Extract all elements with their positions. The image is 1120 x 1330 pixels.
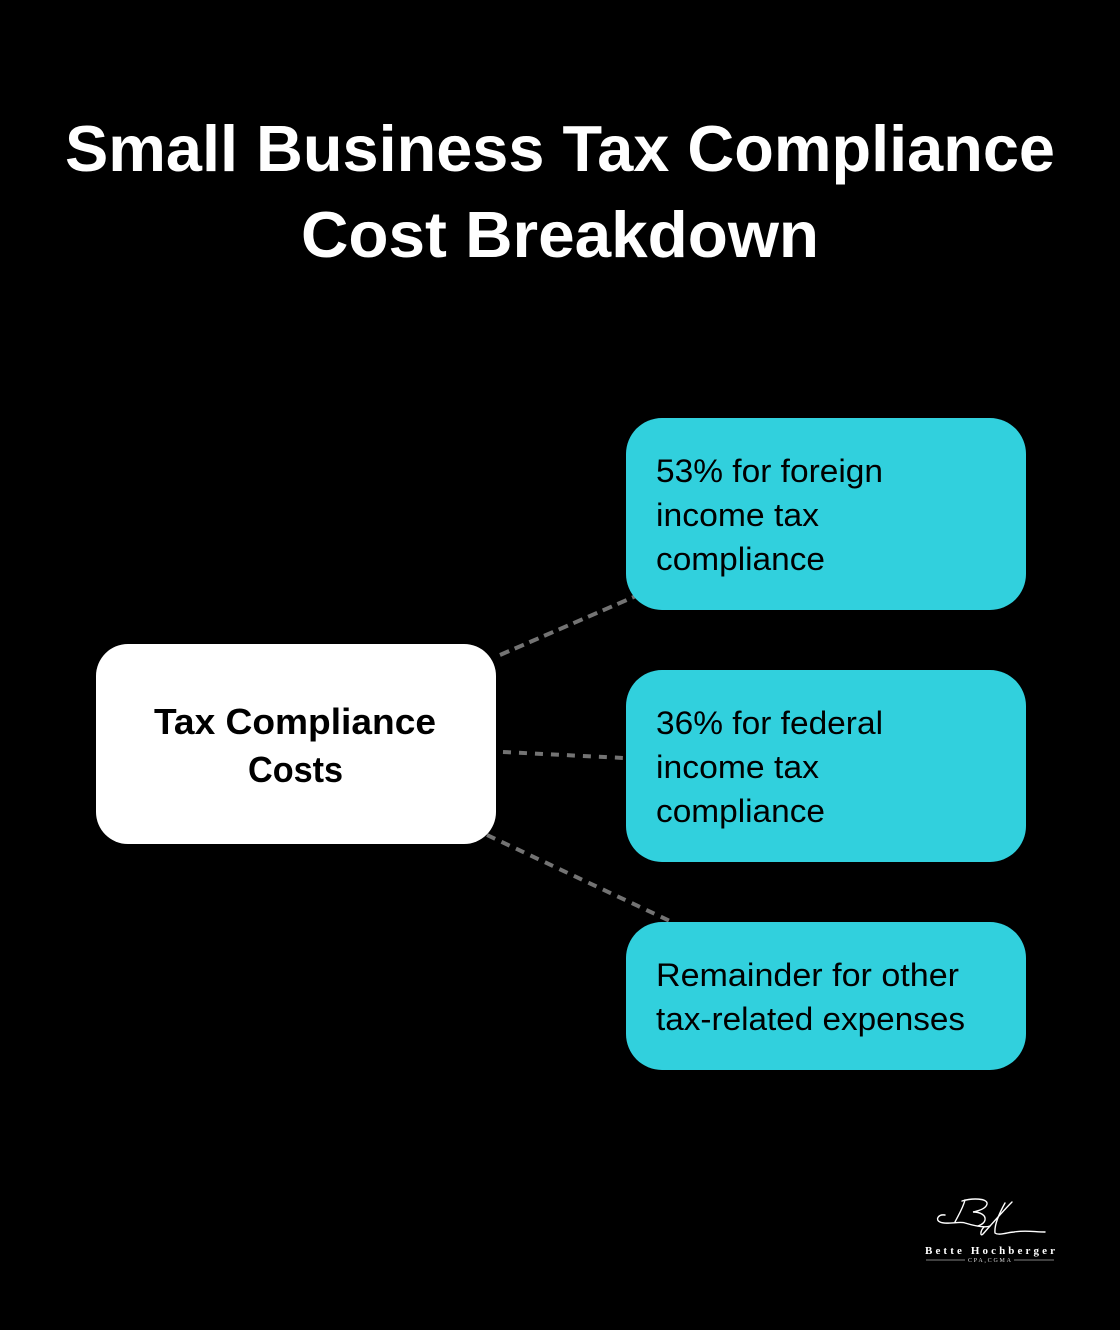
connector: costs to federal income tax bbox=[503, 752, 624, 758]
panel: federal income tax: income tax bbox=[656, 749, 819, 785]
panel: tax compliance costs: Costs bbox=[248, 749, 343, 790]
connector: costs to foreign income tax bbox=[500, 596, 636, 655]
title: Cost Breakdown bbox=[301, 198, 819, 271]
panel: other expenses: tax-related expenses bbox=[656, 1001, 965, 1037]
panel: federal income tax: compliance bbox=[656, 793, 825, 829]
panel: foreign income tax: 53% for foreign bbox=[656, 453, 883, 489]
panel: tax compliance costs bbox=[96, 644, 496, 844]
logo: Bette Hochberger signature: Bette Hochberger bbox=[925, 1245, 1055, 1257]
logo: Bette Hochberger signature: CPA,CGMA bbox=[968, 1258, 1012, 1264]
panel: federal income tax: 36% for federal bbox=[656, 705, 883, 741]
title: Small Business Tax Compliance bbox=[65, 112, 1055, 185]
panel: foreign income tax bbox=[626, 418, 1026, 610]
connector: costs to other expenses bbox=[487, 835, 672, 922]
panel: federal income tax bbox=[626, 670, 1026, 862]
panel: foreign income tax: compliance bbox=[656, 541, 825, 577]
logo: Bette Hochberger signature bbox=[925, 1199, 1055, 1264]
panel: tax compliance costs: Tax Compliance bbox=[154, 701, 436, 742]
panel: other expenses bbox=[626, 922, 1026, 1070]
panel: foreign income tax: income tax bbox=[656, 497, 819, 533]
panel: other expenses: Remainder for other bbox=[656, 957, 959, 993]
title bbox=[65, 112, 1055, 271]
